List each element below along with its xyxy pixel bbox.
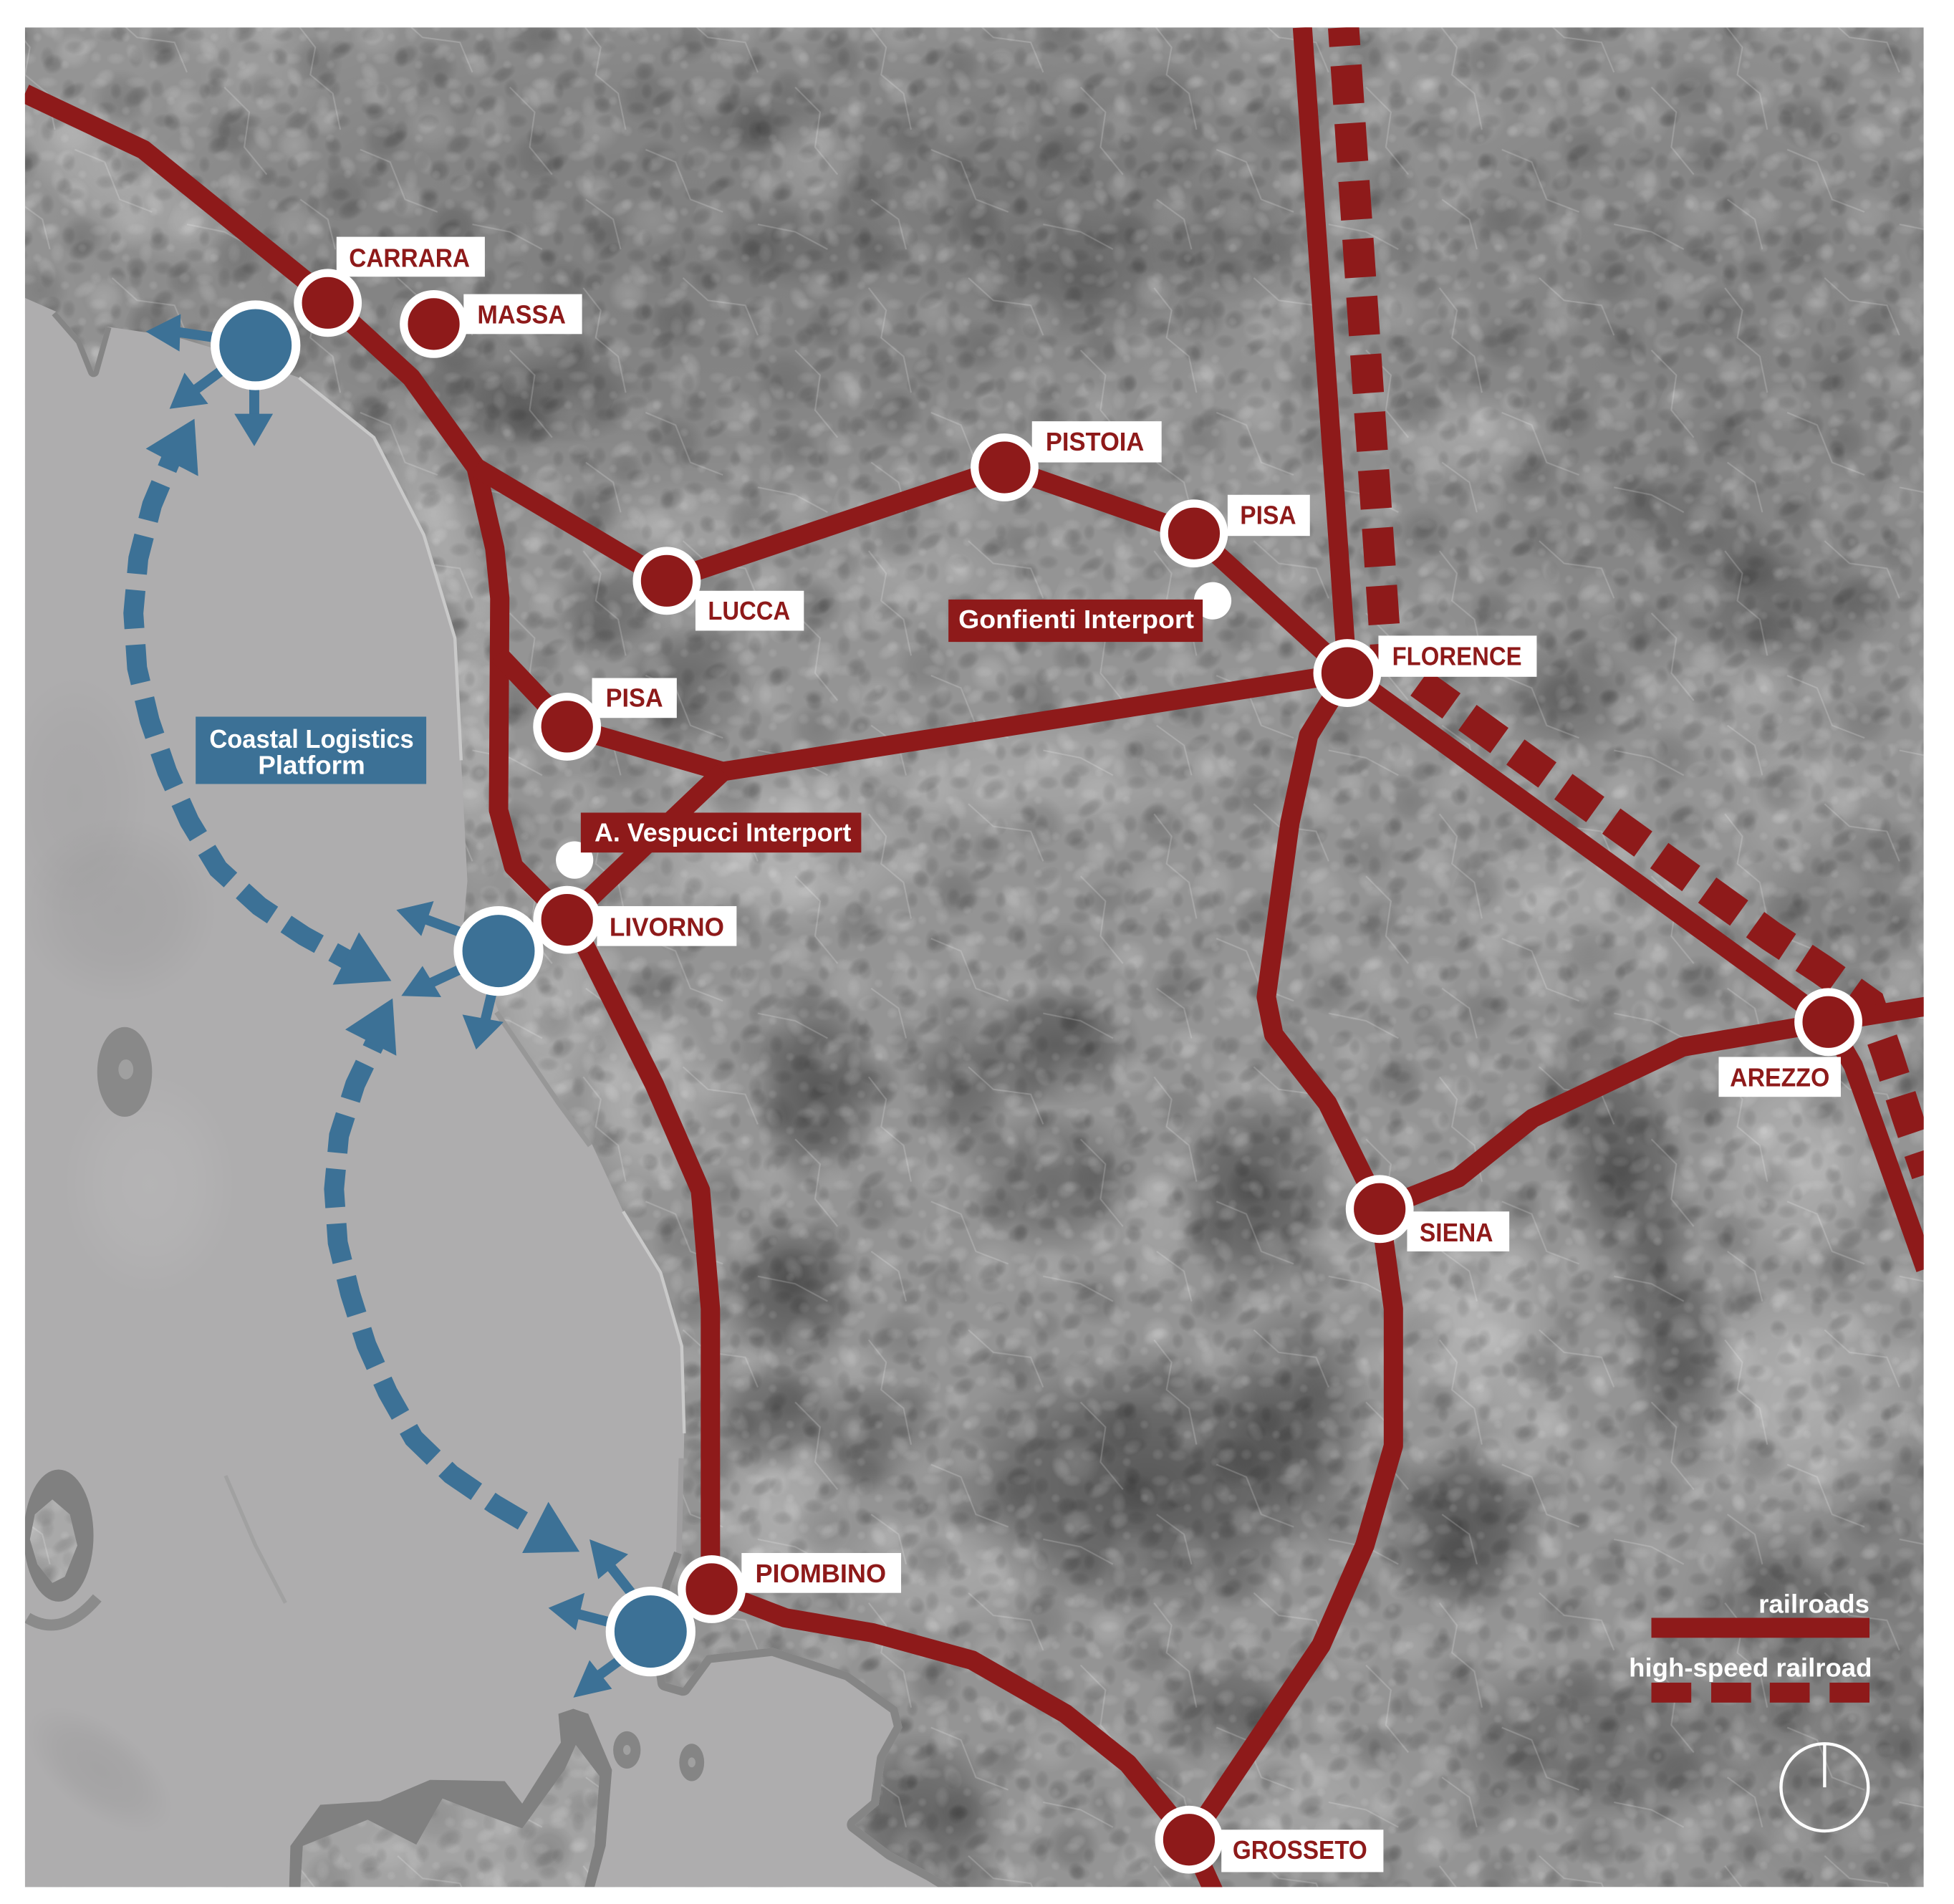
station: Lucca: LUCCA: [708, 596, 790, 625]
station: Florence: FLORENCE: [1392, 641, 1522, 670]
small island patches: [118, 1059, 696, 1767]
label: Coastal Logistics Platform: [196, 716, 426, 784]
label: Gonfienti Interport: [948, 600, 1203, 642]
station: Siena: SIENA: [1420, 1218, 1493, 1247]
Arezzo south railroad: [1829, 1022, 1925, 1269]
legend: high-speed railroad: [1629, 1653, 1872, 1703]
station: Arezzo: [1718, 992, 1858, 1097]
station: Livorno: [537, 890, 736, 950]
interport dot: Gonfienti: [1194, 582, 1231, 620]
label: Coastal Logistics Platform: Platform: [258, 751, 365, 780]
station: Livorno: LIVORNO: [610, 913, 724, 942]
label: Coastal Logistics Platform: Coastal Logistics: [209, 724, 414, 754]
station: Florence: [1317, 635, 1536, 703]
station: Piombino: PIOMBINO: [755, 1559, 886, 1588]
station: Pisa coast: PISA: [606, 683, 663, 713]
station: Carrara: [298, 237, 485, 333]
central dark terrain: [549, 559, 1857, 1902]
Lucca Pistoia Florence railroad: [476, 467, 1347, 673]
high-speed railroad southeast: [1420, 683, 1927, 1174]
island land brightening: [30, 1499, 600, 1887]
port node: Piombino: [549, 1539, 691, 1698]
sea: [25, 298, 953, 1887]
Piombino Grosseto railroad: [711, 1589, 1190, 1840]
station: Piombino: [682, 1553, 901, 1619]
station: Pisa coast: [537, 678, 677, 756]
blue dashed arc: south: [334, 999, 579, 1553]
Siena Arezzo railroad: [1380, 1006, 1930, 1209]
station: Pisa inland: [1164, 495, 1310, 563]
label: A. Vespucci Interport: A. Vespucci Interport: [595, 817, 851, 847]
legend: [1629, 1590, 1872, 1703]
station: Pistoia: PISTOIA: [1046, 427, 1144, 456]
interport dot: A. Vespucci: [556, 841, 593, 879]
high-speed railroad north: [1344, 27, 1387, 660]
Livorno connection: [567, 771, 723, 920]
Florence Arezzo railroad: [1347, 673, 1829, 1022]
coastline beach highlight: [299, 378, 684, 1433]
legend: railroads: railroads: [1758, 1590, 1869, 1619]
station: Siena: [1349, 1179, 1509, 1251]
north arrow: [1781, 1744, 1868, 1831]
north railroad: [1302, 27, 1347, 673]
station: Pisa inland: PISA: [1240, 501, 1296, 530]
sea mottling: [0, 673, 285, 1858]
station: Carrara: CARRARA: [349, 243, 470, 272]
station: Arezzo: AREZZO: [1730, 1062, 1829, 1092]
legend: railroads: [1652, 1590, 1869, 1638]
port node: Livorno: [396, 901, 539, 1049]
legend: high-speed railroad: high-speed railroad: [1629, 1653, 1872, 1682]
station: Pistoia: [975, 421, 1162, 497]
label: Gonfienti Interport: Gonfienti Interport: [958, 605, 1194, 634]
blue dashed arc: north: [133, 419, 391, 985]
label: A. Vespucci Interport: [581, 812, 861, 852]
station: Lucca: [637, 551, 804, 630]
Pisa Florence railroad: [499, 654, 1347, 771]
island shadows: [24, 1027, 704, 1887]
station: Grosseto: [1159, 1809, 1383, 1872]
coastal railroad: [25, 93, 711, 1589]
station: Massa: MASSA: [477, 300, 566, 330]
Florence Siena Grosseto railroad: [1190, 673, 1393, 1895]
coastal shadow: [56, 312, 953, 1887]
station: Grosseto: GROSSETO: [1233, 1835, 1367, 1865]
station: Massa: [404, 294, 582, 354]
port node: Carrara coast: [146, 304, 296, 446]
